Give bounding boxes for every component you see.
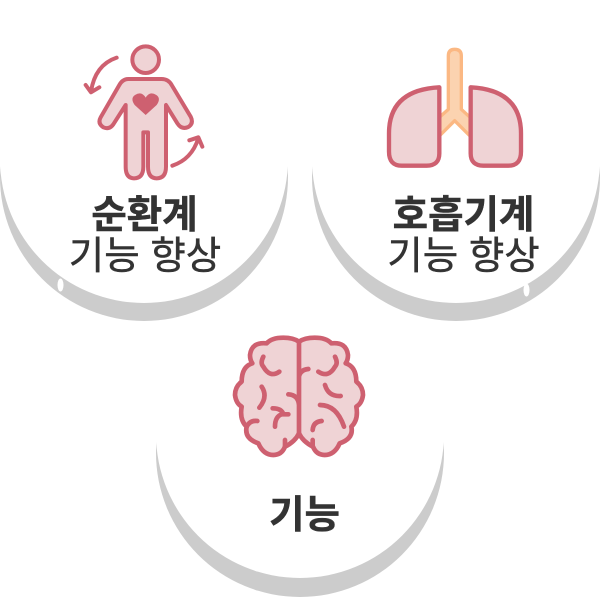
notch left <box>58 278 64 292</box>
circle bottom <box>156 290 444 578</box>
panel: circulatory function <box>0 15 288 321</box>
icon: brain <box>235 338 363 455</box>
subheading: function improvement: 기능 향상 <box>69 235 221 278</box>
icon: person with heart and arrows <box>86 46 202 178</box>
panel: respiratory function <box>312 15 600 321</box>
circle right <box>312 15 600 303</box>
heading: function: 기능 <box>269 494 340 537</box>
panel: function <box>156 290 444 597</box>
heading: circulatory: 순환계 <box>91 194 198 237</box>
heading: respiratory: 호흡기계 <box>393 194 534 237</box>
circle shadow left <box>0 33 288 321</box>
icon: lungs <box>389 49 521 166</box>
subheading: function improvement: 기능 향상 <box>387 235 540 278</box>
circle left <box>0 15 288 303</box>
notch right <box>524 284 530 296</box>
circle shadow bottom <box>156 309 444 597</box>
circle shadow right <box>312 33 600 321</box>
